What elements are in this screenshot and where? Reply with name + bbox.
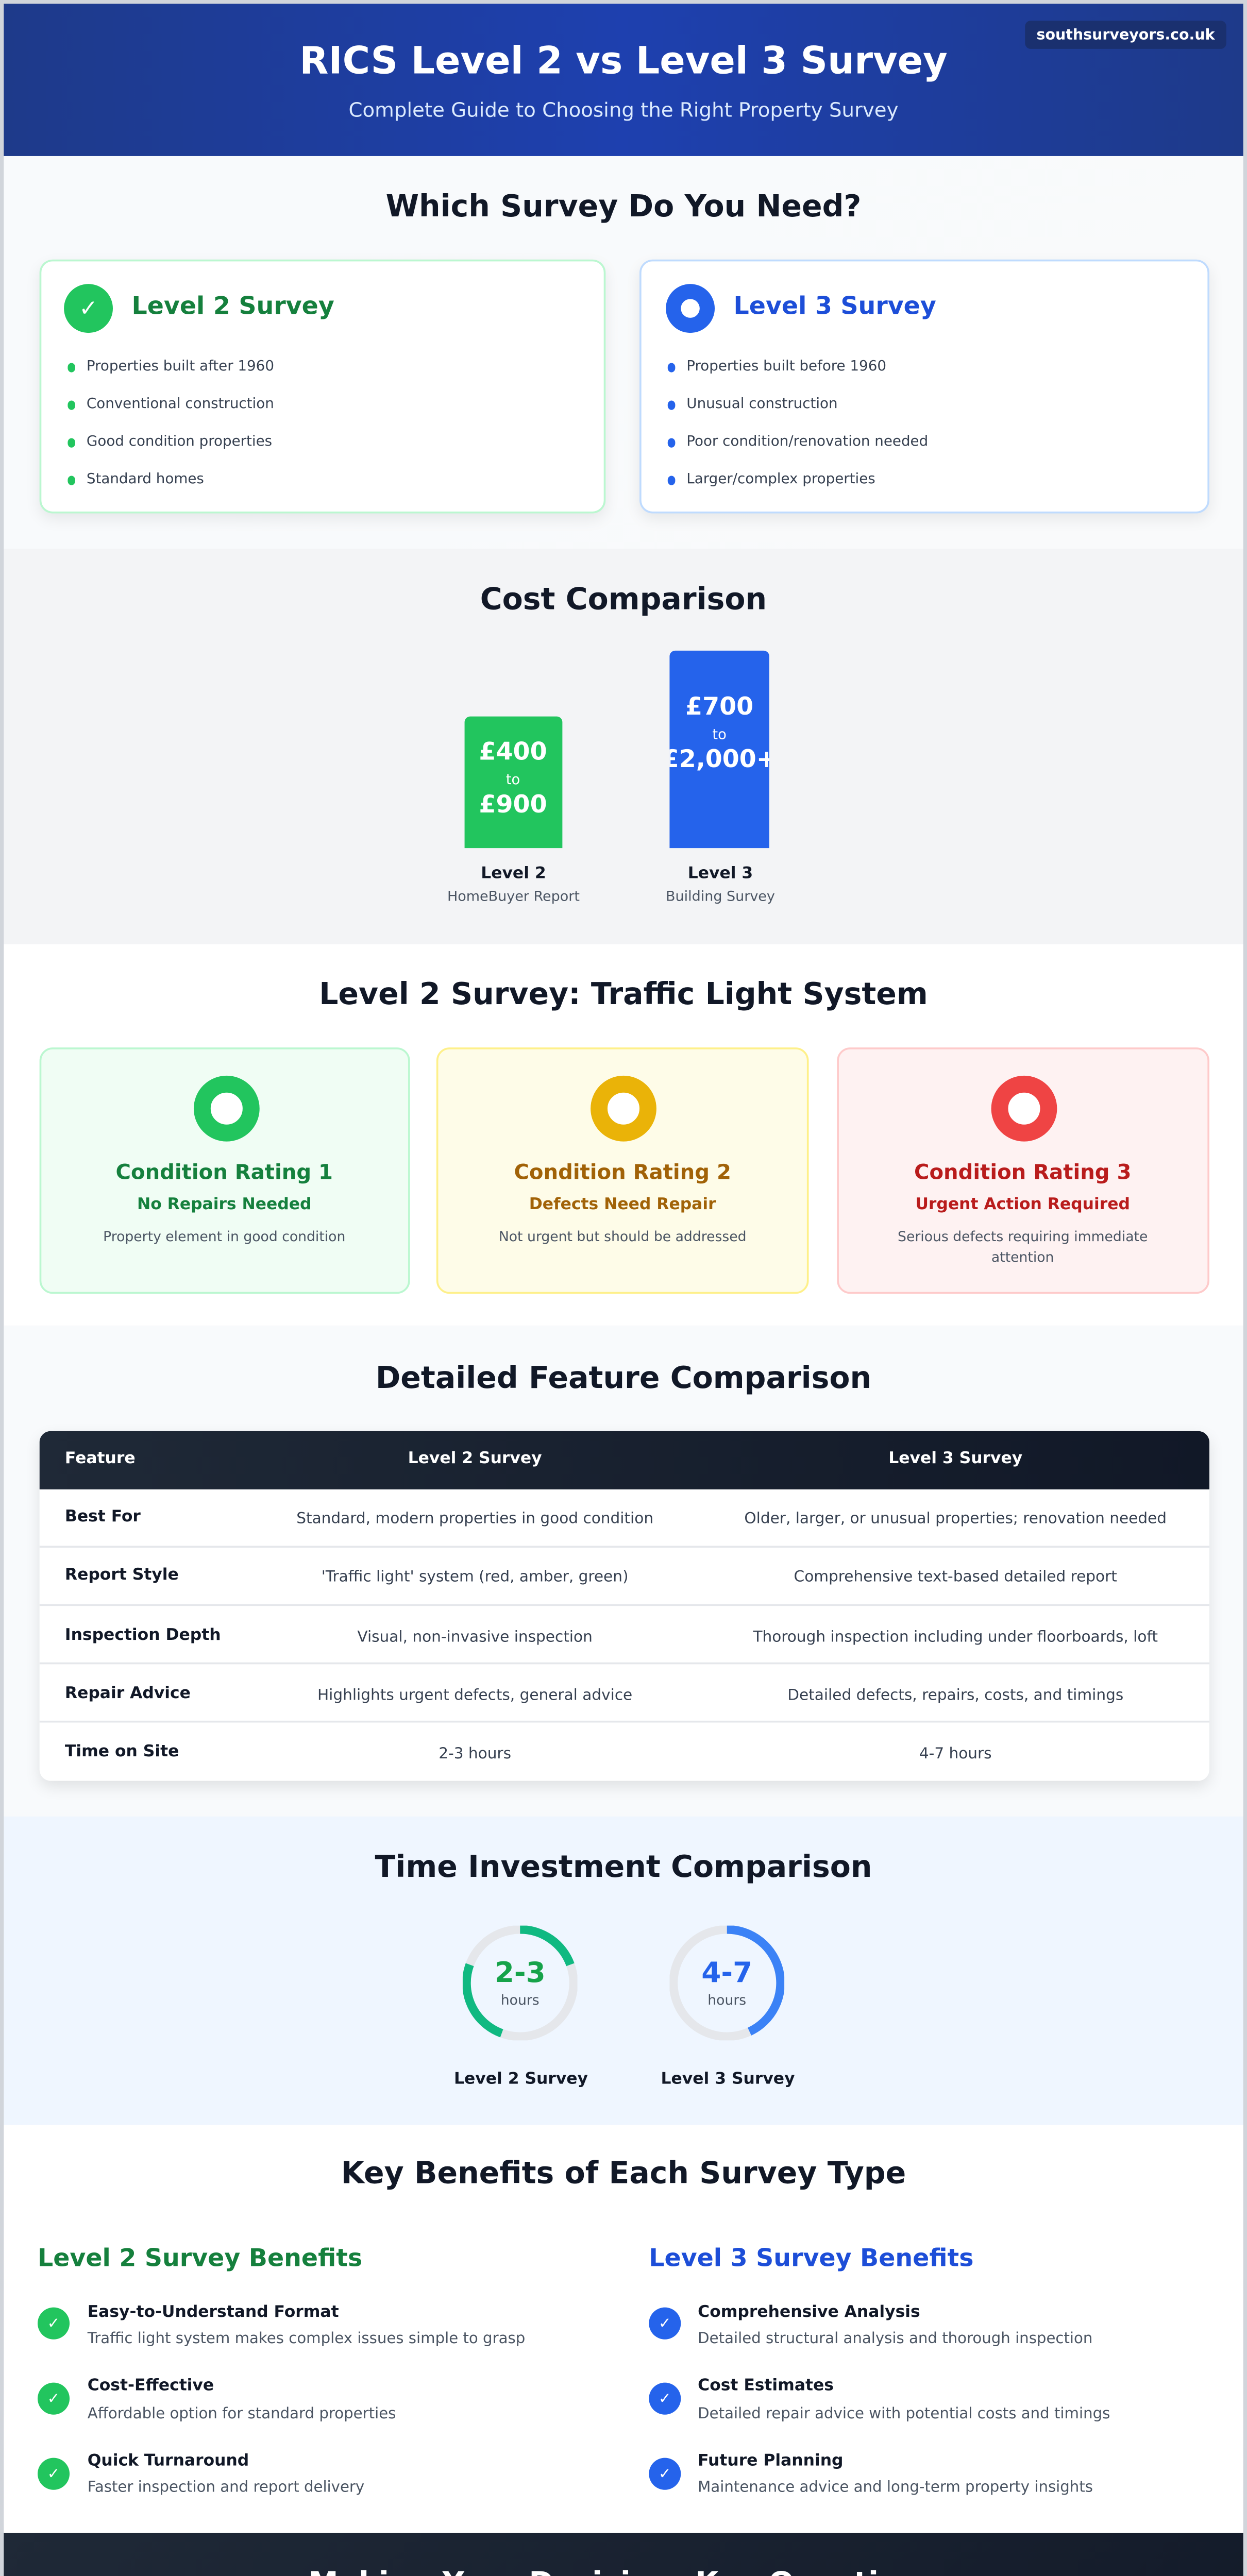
card: level 3	[639, 260, 1209, 513]
card: rating 2	[436, 1047, 809, 1293]
heading: Key Benefits of Each Survey Type	[341, 2155, 906, 2191]
bullets: Poor condition/renovation needed	[686, 433, 928, 449]
label: level 3: Level 3 Survey	[661, 2070, 795, 2088]
chart: level 2 ring: 2-3	[495, 1956, 546, 1990]
column: level 2 benefits	[38, 2246, 525, 2496]
heading: Time Investment Comparison	[375, 1848, 872, 1884]
heading: Cost Comparison	[480, 580, 767, 616]
table header: Level 2 Survey	[408, 1450, 542, 1469]
badge: southsurveyors.co.uk	[1037, 26, 1215, 43]
column: level 2 benefits: ✓	[47, 2314, 60, 2331]
icon: green light	[193, 1075, 259, 1141]
column: level 3 benefits: ✓	[659, 2465, 671, 2482]
card: rating 1: Condition Rating 1	[116, 1160, 333, 1185]
panel: traffic light	[4, 944, 1243, 1326]
bar: level 3: £700	[685, 694, 753, 722]
row: best for: Best For	[65, 1509, 141, 1528]
column: level 3 benefits: Detailed structural analysis and thorough inspection	[698, 2330, 1092, 2347]
bar chart	[447, 650, 775, 904]
card: rating 3	[837, 1047, 1208, 1293]
card: rating 2: Not urgent but should be addressed	[499, 1228, 747, 1245]
panel: decision questions	[4, 2533, 1243, 2576]
icon: clock	[666, 284, 715, 333]
chart: level 3 ring: hours	[707, 1992, 746, 2009]
row: repair advice: Detailed defects, repairs, costs, and timings	[787, 1685, 1123, 1703]
row: repair advice: Repair Advice	[65, 1685, 191, 1703]
column: level 2 benefits: Affordable option for standard properties	[88, 2404, 396, 2421]
row: report style: Comprehensive text-based detailed report	[794, 1567, 1117, 1586]
label: level 2	[447, 864, 580, 904]
bullets	[68, 358, 274, 487]
column: level 2 benefits: Traffic light system makes complex issues simple to grasp	[88, 2330, 525, 2347]
chart: level 2 ring: hours	[501, 1992, 540, 2009]
row: time on site: Time on Site	[65, 1743, 179, 1762]
bullets: Standard homes	[87, 470, 204, 487]
label: level 2: Level 2 Survey	[454, 2070, 588, 2088]
icon: red light	[991, 1075, 1057, 1141]
bullets: Larger/complex properties	[686, 470, 875, 487]
column: level 2 benefits: Cost-Effective	[88, 2377, 214, 2396]
table	[39, 1431, 1209, 1782]
chart: level 3 ring	[670, 1926, 784, 2040]
card title: Level 2 Survey	[132, 293, 334, 321]
heading: Level 2 Survey: Traffic Light System	[319, 975, 928, 1011]
bullets: Unusual construction	[686, 395, 838, 412]
table header	[39, 1431, 1209, 1489]
row: report style: Report Style	[65, 1567, 179, 1586]
column: level 2 benefits: Quick Turnaround	[88, 2451, 249, 2470]
row: repair advice	[39, 1665, 1209, 1723]
column: level 3 benefits: Future Planning	[698, 2451, 843, 2470]
card: rating 3: Serious defects requiring immediate	[898, 1228, 1148, 1245]
table header: Level 3 Survey	[888, 1450, 1022, 1469]
bullets: Properties built before 1960	[686, 358, 886, 374]
chart: level 2 ring	[463, 1926, 577, 2040]
bullets: Conventional construction	[87, 395, 274, 412]
icon: amber light	[591, 1075, 656, 1141]
column: level 3 benefits: ✓	[659, 2389, 671, 2406]
row: repair advice: Highlights urgent defects, general advice	[317, 1685, 632, 1703]
column: level 3 benefits: Comprehensive Analysis	[698, 2303, 920, 2321]
card: rating 1: No Repairs Needed	[137, 1196, 312, 1215]
bar: level 3: to	[712, 726, 727, 743]
column: level 2 benefits: Level 2 Survey Benefits	[38, 2246, 362, 2274]
label: level 3: Building Survey	[666, 887, 775, 904]
column: level 3 benefits: Detailed repair advice with potential costs and timings	[698, 2404, 1110, 2421]
subtitle: Complete Guide to Choosing the Right Property Survey	[349, 99, 898, 122]
card: rating 2: Defects Need Repair	[529, 1196, 716, 1215]
bar: level 2: to	[506, 771, 520, 788]
bar: level 2: £900	[479, 792, 547, 820]
row: inspection depth	[39, 1606, 1209, 1665]
row: report style	[39, 1548, 1209, 1606]
column: level 2 benefits: ✓	[47, 2465, 60, 2482]
panel: cost comparison	[4, 548, 1243, 944]
title: RICS Level 2 vs Level 3 Survey	[299, 38, 948, 83]
card: rating 3: Condition Rating 3	[914, 1160, 1131, 1185]
card: rating 3: Urgent Action Required	[915, 1196, 1130, 1215]
bullets	[668, 358, 928, 487]
column: level 2 benefits: Easy-to-Understand Format	[88, 2303, 339, 2321]
card title: Level 3 Survey	[734, 293, 936, 321]
bar: level 2: £400	[479, 739, 547, 767]
heading: Detailed Feature Comparison	[376, 1359, 871, 1395]
bullets: Properties built after 1960	[87, 358, 274, 374]
row: inspection depth: Visual, non-invasive inspection	[357, 1626, 593, 1645]
column: level 3 benefits	[649, 2246, 1110, 2496]
panel: key benefits	[4, 2124, 1243, 2532]
column: level 2 benefits: ✓	[47, 2389, 60, 2406]
table header: Feature	[65, 1450, 136, 1469]
header	[4, 4, 1243, 156]
row: best for	[39, 1489, 1209, 1548]
column: level 3 benefits: ✓	[659, 2314, 671, 2331]
bullets: Good condition properties	[87, 433, 272, 449]
row: inspection depth: Thorough inspection including under floorboards, loft	[753, 1626, 1158, 1645]
row: report style: 'Traffic light' system (red, amber, green)	[322, 1567, 629, 1586]
badge	[1025, 21, 1226, 49]
row: best for: Standard, modern properties in good condition	[296, 1509, 653, 1528]
label: level 3	[666, 864, 775, 904]
card: rating 1	[39, 1047, 410, 1293]
heading: Which Survey Do You Need?	[386, 188, 861, 224]
column: level 3 benefits: Cost Estimates	[698, 2377, 834, 2396]
row: time on site	[65, 1743, 992, 1762]
label: level 3: Level 3	[688, 864, 753, 883]
panel: feature comparison	[4, 1326, 1243, 1816]
card: rating 3: attention	[991, 1249, 1054, 1266]
bar: level 2	[464, 717, 562, 848]
card: level 2	[40, 260, 605, 513]
column: level 2 benefits: Faster inspection and report delivery	[88, 2479, 364, 2496]
bar: level 3	[669, 651, 769, 848]
chart: level 3 ring: 4-7	[701, 1956, 752, 1990]
panel: time investment	[4, 1816, 1243, 2124]
card: rating 1: Property element in good condition	[103, 1228, 345, 1245]
row: time on site: 4-7 hours	[919, 1743, 992, 1762]
label: level 2: Level 2	[481, 864, 546, 883]
column: level 3 benefits: Maintenance advice and long-term property insights	[698, 2479, 1093, 2496]
icon: check: ✓	[79, 295, 98, 321]
column: level 3 benefits: Level 3 Survey Benefits	[649, 2246, 973, 2274]
row: best for: Older, larger, or unusual properties; renovation needed	[744, 1509, 1167, 1528]
row: time on site: 2-3 hours	[439, 1743, 511, 1762]
panel: which survey	[4, 156, 1243, 548]
icon: check	[64, 284, 113, 333]
card: rating 2: Condition Rating 2	[514, 1160, 731, 1185]
label: level 2: HomeBuyer Report	[447, 887, 580, 904]
row: inspection depth: Inspection Depth	[65, 1626, 221, 1645]
